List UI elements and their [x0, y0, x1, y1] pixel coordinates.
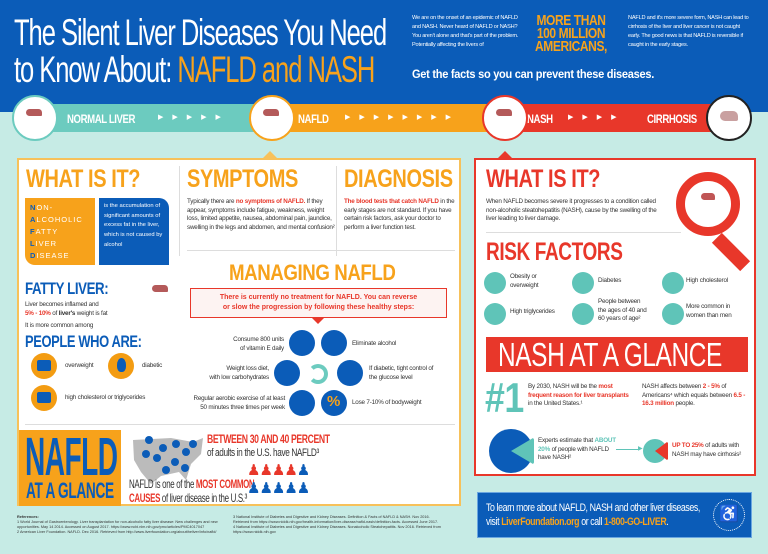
symptoms: Typically there are no symptoms of NAFLD. If they appear, symptoms include fatigue, weakness, weight loss, limited appetite, nausea, abdominal pain, jaundice, swelling in the legs and abdomen, and mental confusion²: [187, 198, 335, 231]
NAFLD acronym box: LIVER: [30, 239, 57, 248]
timeline: ▶▶▶▶▶▶▶▶: [345, 114, 460, 121]
panel: NASH: Obesity or: [510, 273, 537, 280]
big stat: AMERICANS,: [535, 38, 607, 55]
timeline: CIRRHOSIS: [647, 112, 697, 126]
title: to Know About: NAFLD and NASH: [14, 49, 374, 90]
panel: NASH: High triglycerides: [510, 308, 555, 315]
bar: nafld: [270, 104, 510, 132]
panel: NASH: People between: [598, 298, 640, 305]
arrow: [616, 449, 638, 450]
tagline: Get the facts so you can prevent these diseases.: [412, 67, 654, 81]
fatty liver: Liver becomes inflamed and: [25, 301, 99, 308]
NAFLD acronym box: FATTY: [30, 227, 58, 236]
panel: NASH: the ages of 40 and: [598, 307, 647, 314]
icon: recycle arrows: [308, 364, 328, 384]
stat: 30-40 percent: [207, 432, 330, 459]
panel: NAFLD: the glucose level: [369, 374, 413, 381]
intro text right: NAFLD and it's more severe form, NASH can lead to cirrhosis of the liver and liver cancer is not caught early. The good news is that NAFLD is reversible if caught in the early stages.: [628, 15, 749, 48]
timeline: NASH: [527, 112, 553, 126]
panel: NAFLD: Eliminate alcohol: [352, 340, 396, 347]
panel: NAFLD: overweight: [65, 362, 93, 369]
panel: NASH: By 2030, NASH will be the most frequent reason for liver transplants in the United States.¹: [528, 383, 629, 407]
big stat: MORE THAN: [536, 12, 606, 29]
callout: no treatment: There is currently no treatment for NAFLD. You can reverse: [220, 294, 417, 301]
panel: NASH: 60 years of age²: [598, 315, 640, 322]
diagnosis: [344, 165, 454, 231]
chart: pie 25%: [643, 439, 668, 463]
stat: most common: CAUSES of liver disease in the U.S.³: [129, 491, 247, 505]
panel: NAFLD: Consume 800 units: [233, 336, 284, 343]
fatty liver: FATTY LIVER:: [25, 279, 108, 298]
divider: [25, 424, 455, 425]
definition box: [99, 198, 169, 265]
diagnosis: DIAGNOSIS: [344, 165, 453, 193]
definition box: is the accumulation of significant amounts of excess fat in the liver, which is not caused by alcohol: [104, 203, 162, 248]
panel: NAFLD: Lose 7-10% of bodyweight: [352, 399, 421, 406]
references: 1 World Journal of Gastroenterology. Liver transplantation for non-alcoholic fatty liver disease: New challenges and new opportunities. May 14 2014. Accessed on August 2017. https://www.ncbi.nlm.nih.gov/pmc/articles/PMC4017047: [17, 520, 218, 529]
people who are: It is more common among: [25, 322, 93, 329]
icons: risk groups: [31, 353, 57, 379]
panel: NAFLD: %: [327, 393, 340, 410]
diagnosis: The blood tests that catch NAFLD in the early stages are not standard. If you have certain risk factors, ask your doctor to perform a liver function test.: [344, 198, 454, 231]
panel: NAFLD: Regular aerobic exercise of at least: [193, 395, 285, 402]
icon: logo: [713, 499, 745, 531]
heading: managing nafld: MANAGING NAFLD: [229, 260, 395, 285]
callout: no treatment: or slow the progression by following these healthy steps:: [223, 304, 414, 311]
NAFLD acronym box: [25, 198, 95, 265]
stat: most common: NAFLD is one of the MOST COMMON: [129, 477, 254, 491]
stat: most common: [129, 477, 254, 505]
callout: learn more: [477, 492, 752, 538]
risk icons: [484, 272, 506, 294]
panel: NASH: women than men: [686, 312, 732, 319]
big stat: 100 MILLION: [537, 25, 605, 42]
people who are: [25, 322, 142, 351]
symptoms: [187, 165, 335, 231]
big stat: [535, 12, 607, 55]
fatty liver: 5% - 10% of liver's weight is fat: [25, 310, 107, 317]
bar: nash: [505, 104, 725, 132]
NAFLD acronym box: ALCOHOLIC: [30, 215, 83, 224]
notch nafld: [262, 151, 278, 159]
timeline: ▶▶▶▶▶: [158, 114, 230, 121]
panel: NAFLD: 50 minutes three times per week: [200, 404, 285, 411]
references: [17, 515, 441, 534]
panel: NASH: overweight: [510, 282, 538, 289]
fatty liver: [25, 279, 108, 317]
NAFLD acronym box: DISEASE: [30, 251, 70, 260]
timeline: [12, 95, 752, 141]
timeline: ▶▶▶▶: [568, 114, 626, 121]
heading: what is it: WHAT IS IT?: [26, 165, 140, 193]
panel: NAFLD: of vitamin E daily: [240, 345, 284, 352]
NAFLD at a glance box: [19, 430, 121, 506]
chart: pie 20%: [489, 429, 534, 473]
icon: magnifier: [676, 172, 740, 236]
panel: NASH: High cholesterol: [686, 277, 728, 284]
map: [133, 436, 203, 484]
panel: NASH: Experts estimate that ABOUT 20% of people with NAFLD have NASH²: [538, 437, 616, 461]
icons: managing steps: [289, 330, 315, 356]
heading: what is it: WHAT IS IT?: [486, 165, 600, 193]
panel: NAFLD: Weight loss diet,: [226, 365, 269, 372]
icon: liver small: [152, 285, 168, 292]
people icons: ♟♟♟♟♟: [247, 480, 309, 497]
panel: NASH: When NAFLD becomes severe it progresses to a condition called non-alcoholic steatohepatitis (NASH), cause by the swelling of the liver leading to liver damage.: [486, 198, 657, 222]
timeline: NAFLD: [298, 112, 329, 126]
people who are: PEOPLE WHO ARE:: [25, 332, 142, 351]
references: 2 American Liver Foundation. NAFLD. Dec 2016. Retrieved from http://www.liverfoundation.org/abouttheliver/info/nafld/: [17, 530, 216, 534]
heading: risk factors: RISK FACTORS: [486, 238, 623, 266]
panel: NAFLD: diabetic: [142, 362, 162, 369]
title: [14, 12, 386, 90]
panel: NASH: More common in: [686, 303, 730, 310]
stat 2-5%: NASH affects between 2 - 5% of Americans⁴ which equals between 6.5 - 16.3 million people.: [642, 383, 745, 407]
references: 4 National Institute of Diabetes and Digestive and Kidney Diseases. Nonalcoholic Steatohepatitis. Nov 2016. Retrieved from https://www.niddk.nih.gov: [233, 525, 441, 534]
people icons: ♟♟♟♟♟: [247, 462, 309, 479]
callout: no treatment: [190, 288, 447, 318]
bar: normal: [35, 104, 275, 132]
stat #1: #1: [485, 374, 524, 421]
intro text left: We are on the onset of an epidemic of NAFLD and NASH. Never heard of NAFLD or NASH? You aren't alone and that's part of the problem. Potentially affecting the livers of: [412, 15, 518, 48]
panel: NASH: ▶: [638, 446, 643, 452]
panel: NAFLD: high cholesterol or triglycerides: [65, 394, 145, 401]
timeline: NORMAL LIVER: [67, 112, 135, 126]
callout: learn more: To learn more about NAFLD, NASH and other liver diseases,: [486, 502, 700, 514]
title: The Silent Liver Diseases You Need: [14, 12, 386, 53]
divider: [179, 166, 180, 256]
panel: NAFLD: If diabetic, tight control of: [369, 365, 433, 372]
panel: NASH: [474, 158, 756, 476]
NAFLD acronym box: NON-: [30, 203, 53, 212]
header band: [0, 0, 768, 112]
symptoms: SYMPTOMS: [187, 165, 298, 193]
references: References:: [17, 515, 39, 519]
notch nash: [497, 151, 513, 159]
people icons: [247, 462, 309, 497]
icon: liver circles: [12, 95, 58, 141]
NAFLD at a glance box: AT A GLANCE: [26, 478, 114, 503]
panel: NAFLD: [17, 158, 461, 506]
panel: NAFLD: with low carbohydrates: [209, 374, 269, 381]
references: 3 National Institute of Diabetes and Digestive and Kidney Diseases. Definition & Facts of NAFLD & NASH. Nov 2016. Retrieved from https://www.niddk.nih.gov/health-information/liver-disease/nafld-nash/definition-facts. Accessed June 2017.: [233, 515, 438, 524]
callout: learn more: visit LiverFoundation.org or call 1-800-GO-LIVER.: [486, 516, 668, 528]
icon: logo: ♿: [719, 506, 739, 523]
stat: 30-40 percent: BETWEEN 30 AND 40 PERCENT: [207, 432, 330, 446]
stat: 30-40 percent: of adults in the U.S. have NAFLD³: [207, 447, 319, 459]
panel: NASH: Diabetes: [598, 277, 621, 284]
panel: NASH: UP TO 25% of adults with NASH may have cirrhosis²: [672, 442, 741, 458]
